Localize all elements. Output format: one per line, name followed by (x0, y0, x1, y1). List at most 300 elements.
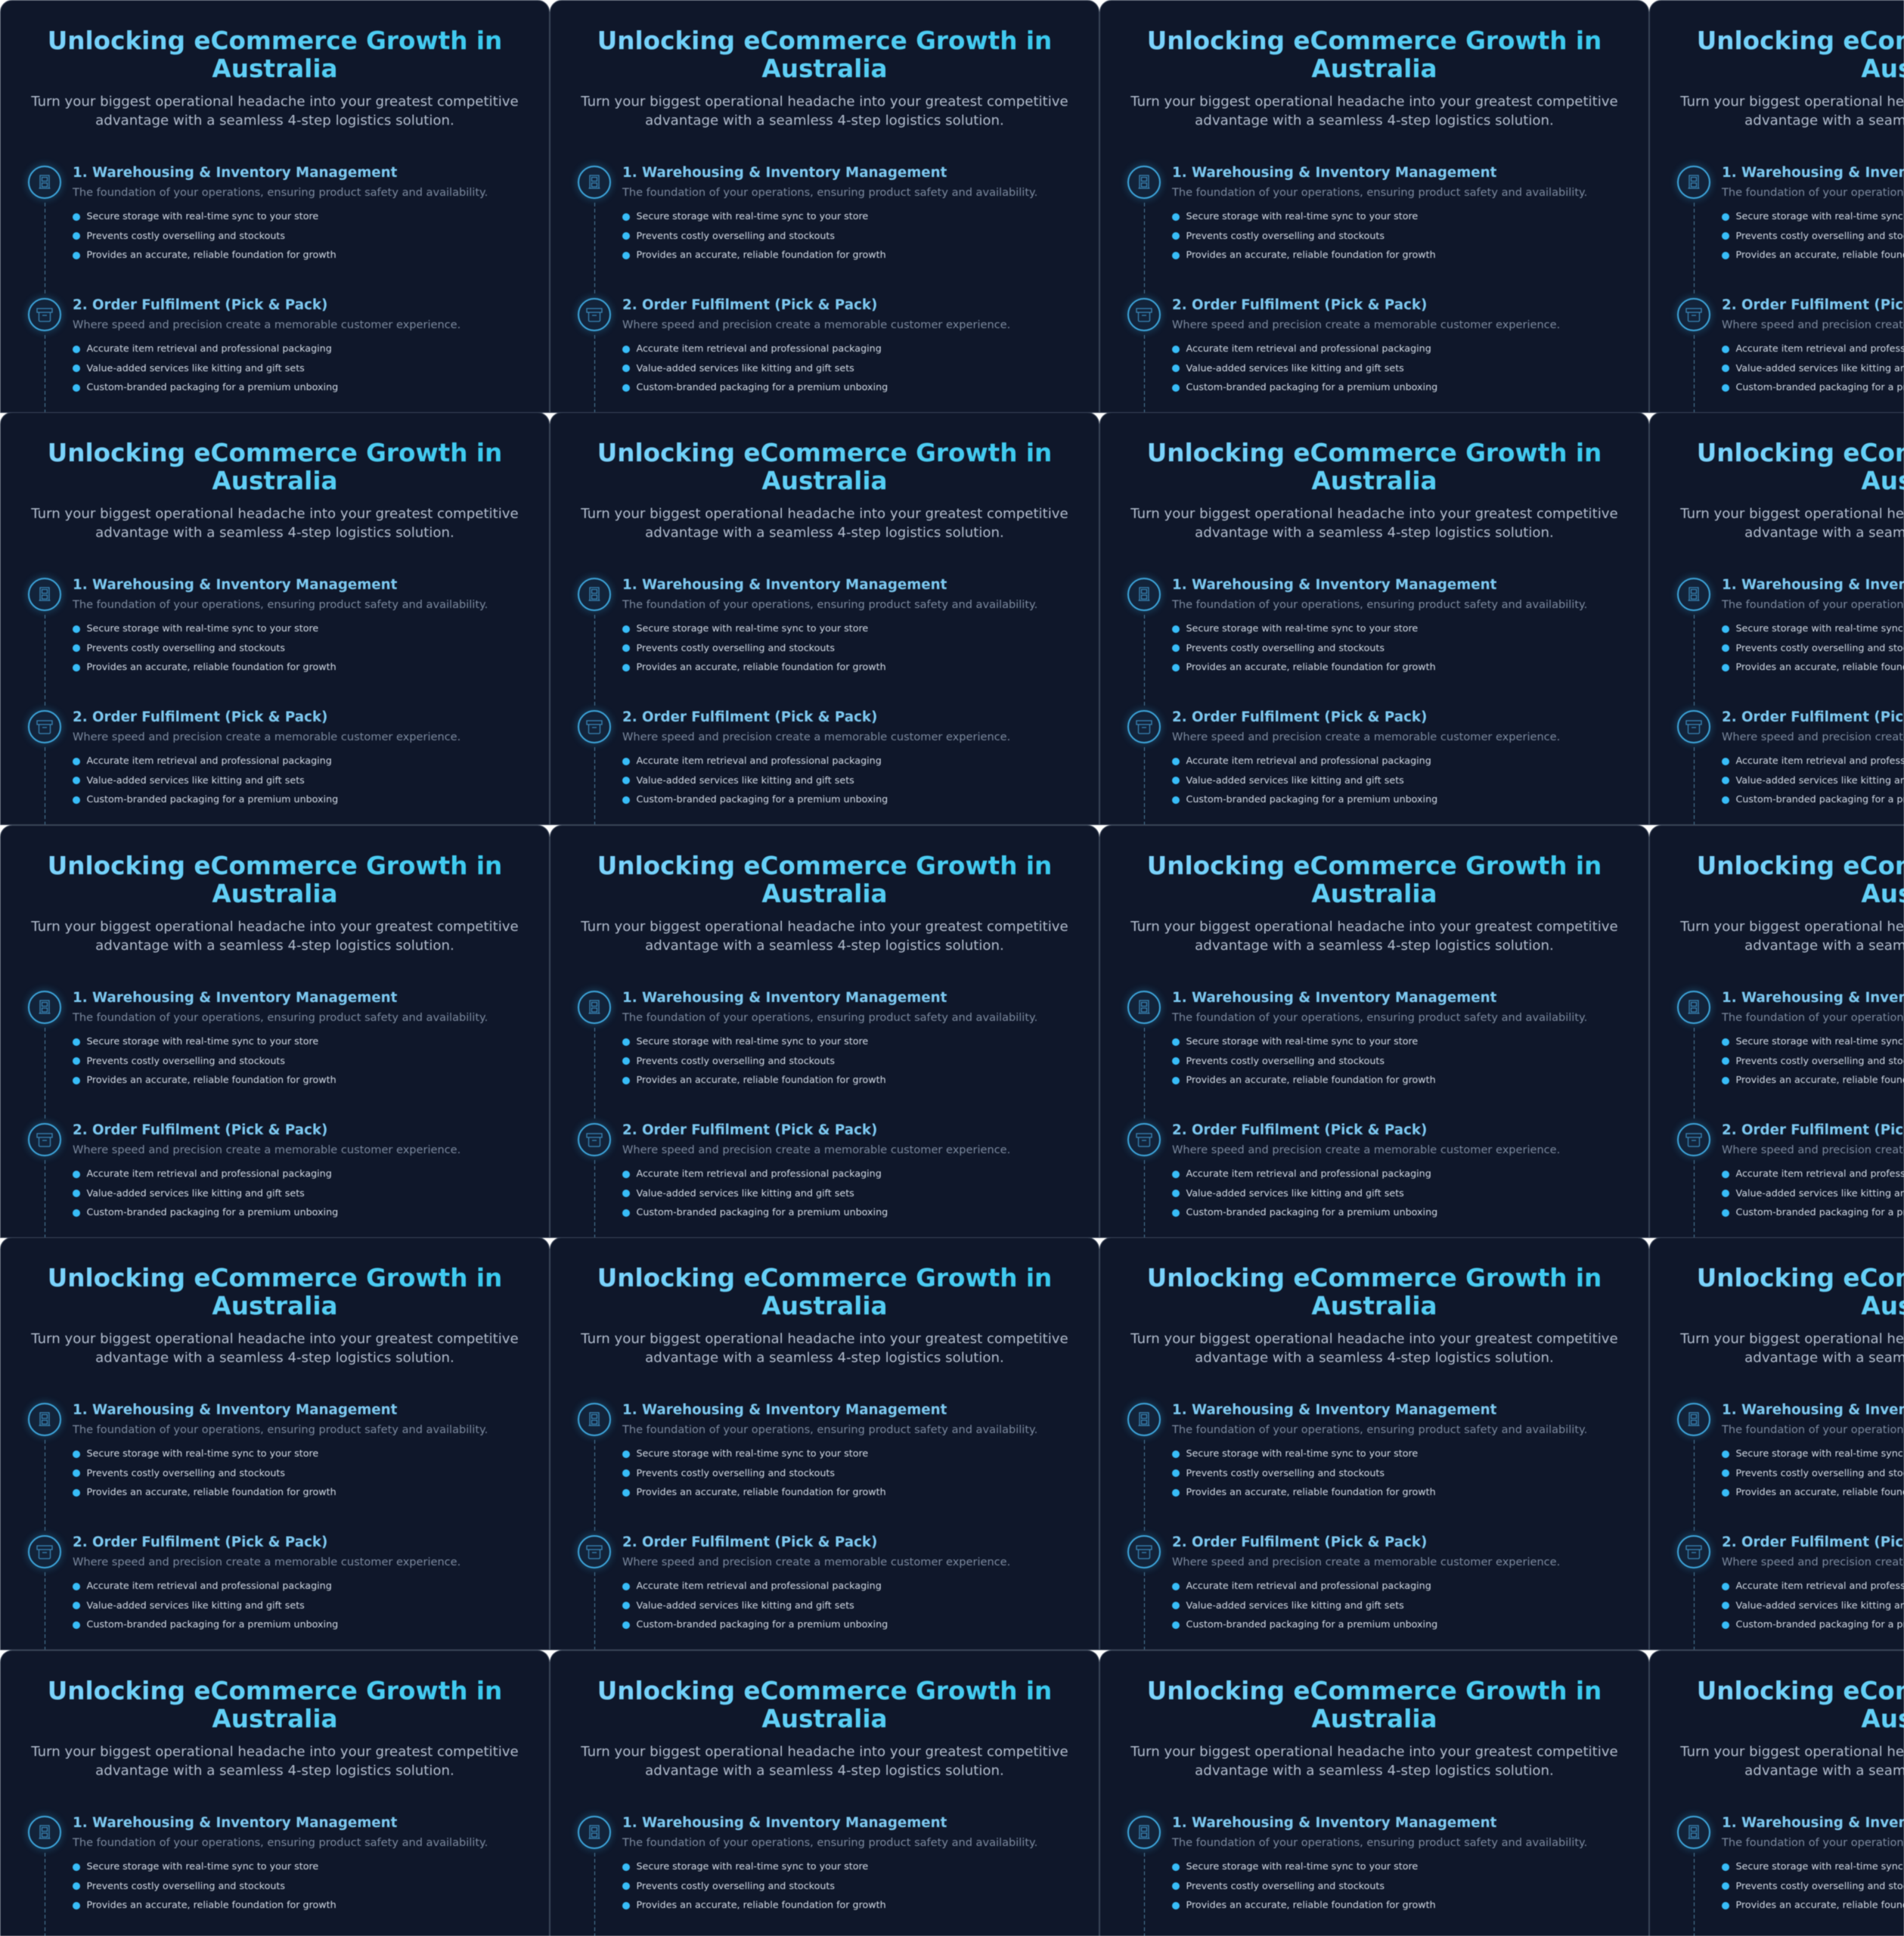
title (550, 439, 1099, 495)
title (550, 852, 1099, 908)
bullets: Custom-branded packaging for a premium unboxing (637, 381, 888, 392)
bullets: Prevents costly overselling and stockouts (86, 230, 285, 241)
bullets: Secure storage with real-time sync to your store (1186, 1035, 1418, 1047)
title: Unlocking eCommerce Growth in (48, 852, 502, 880)
icon: box (28, 1123, 61, 1156)
bullets (73, 1578, 526, 1632)
bullets: Secure storage with real-time sync to your store (637, 1860, 868, 1872)
subtitle (550, 1742, 1099, 1781)
step description: Where speed and precision create a memorable customer experience. (73, 731, 460, 743)
title (1099, 852, 1649, 908)
connector (1694, 335, 1695, 413)
tile r1c1 (0, 0, 550, 413)
subtitle: Turn your biggest operational headache into your greatest competitive (31, 919, 519, 935)
bullets (622, 1446, 1075, 1500)
bullets: Custom-branded packaging for a premium unboxing (637, 1618, 888, 1630)
connector (1694, 1028, 1695, 1121)
connector (594, 747, 595, 825)
step description: The foundation of your operations, ensuring product safety and availability. (622, 1423, 1037, 1436)
title: Australia (1311, 880, 1437, 908)
subtitle: Turn your biggest operational headache into your greatest competitive (31, 1744, 519, 1760)
icon: warehouse (1127, 991, 1161, 1024)
title: Australia (761, 467, 888, 495)
bullets: Accurate item retrieval and professional packaging (1186, 343, 1431, 354)
bullets: Secure storage with real-time sync to your store (637, 1035, 868, 1047)
bullets: Provides an accurate, reliable foundation for growth (1186, 1486, 1436, 1497)
tile r1c4 (1649, 0, 1904, 413)
connector (594, 1853, 595, 1936)
title (0, 852, 550, 908)
bullets: Secure storage with real-time sync to your store (1186, 1447, 1418, 1459)
tile r3c2 (550, 825, 1099, 1238)
title: Australia (212, 1705, 338, 1733)
step heading: 2. Order Fulfilment (Pick & Pack) (622, 1122, 877, 1138)
title: Australia (761, 880, 888, 908)
bullets: Prevents costly overselling and stockouts (86, 642, 285, 653)
title: Australia (761, 1292, 888, 1320)
subtitle: advantage with a seamless 4-step logistics solution. (645, 1350, 1004, 1366)
step 1 (1099, 991, 1649, 1123)
title: Unlocking eCommerce Growth in (48, 439, 502, 467)
bullets: Prevents costly overselling and stockouts (637, 1880, 835, 1891)
icon: box (28, 298, 61, 331)
bullets: Accurate item retrieval and professional packaging (637, 343, 882, 354)
step 2 (550, 1123, 1099, 1238)
bullets: Custom-branded packaging for a premium unboxing (86, 1206, 338, 1218)
title: Unlocking eCommerce Growth in (48, 26, 502, 55)
icon: box (1677, 298, 1710, 331)
step description: Where speed and precision create a memorable customer experience. (1172, 318, 1560, 331)
step heading: 1. Warehousing & Inventory Management (1172, 1402, 1496, 1418)
step description: Where speed and precision create a memorable customer experience. (622, 731, 1010, 743)
step 2 (1124, 293, 1560, 413)
title: Unlocking eCommerce Growth in (48, 1677, 502, 1705)
subtitle: Turn your biggest operational headache into your greatest competitive (31, 1331, 519, 1347)
bullets (622, 1034, 1075, 1087)
bullets (1171, 755, 1437, 805)
icon: box (1677, 1535, 1710, 1568)
icon: box (578, 1123, 611, 1156)
step 1 (24, 573, 488, 706)
step 2 (573, 293, 1010, 413)
bullets (1172, 1578, 1626, 1632)
subtitle: Turn your biggest operational headache into your greatest competitive (31, 506, 519, 522)
bullets: Provides an accurate, reliable foundation for growth (637, 1899, 886, 1910)
icon: warehouse (1127, 166, 1161, 199)
bullets: Provides an accurate, reliable foundation for growth (1186, 1899, 1436, 1910)
tile r4c4 (1649, 1237, 1904, 1650)
bullets: Provides an accurate, reliable foundation for growth (637, 249, 886, 260)
connector (1694, 1572, 1695, 1650)
step heading: 1. Warehousing & Inventory Management (73, 1815, 397, 1831)
bullets: Prevents costly overselling and stockouts (86, 1880, 285, 1891)
title (1649, 27, 1904, 82)
subtitle: Turn your biggest operational headache into your greatest competitive (581, 1744, 1068, 1760)
bullets: Accurate item retrieval and professional packaging (637, 1580, 882, 1591)
connector (1694, 1440, 1695, 1533)
subtitle: Turn your biggest operational headache into your greatest competitive (1130, 94, 1618, 110)
title (1649, 1264, 1904, 1320)
bullets: Provides an accurate, reliable foundation for growth (86, 1074, 336, 1085)
step 1 (1124, 162, 1587, 293)
bullets (73, 1034, 526, 1087)
title: Australia (212, 880, 338, 908)
bullets: Prevents costly overselling and stockouts (1186, 1467, 1385, 1478)
icon: warehouse (1127, 1816, 1161, 1849)
icon: warehouse (1677, 1403, 1710, 1436)
bullets (1171, 622, 1436, 673)
bullets: Value-added services like kitting and gift sets (637, 774, 854, 786)
title: Unlocking eCommerce Growth in (48, 1264, 502, 1292)
bullets: Custom-branded packaging for a premium unboxing (637, 793, 888, 805)
bullets: Provides an accurate, reliable foundation for growth (86, 1486, 336, 1497)
bullets: Provides an accurate, reliable foundation for growth (1186, 1074, 1436, 1085)
icon: warehouse (28, 1816, 61, 1849)
bullets: Accurate item retrieval and professional packaging (86, 755, 332, 766)
tile r5c1 (0, 1650, 550, 1936)
step 1 (550, 1403, 1099, 1535)
subtitle (550, 1329, 1099, 1368)
step description: Where speed and precision create a memorable customer experience. (1172, 1143, 1560, 1156)
bullets: Provides an accurate, reliable foundation for growth (1186, 661, 1436, 672)
step 1 (0, 1403, 550, 1535)
tile r1c2 (550, 0, 1099, 413)
step description: The foundation of your operations, ensuring product safety and availability. (1172, 598, 1587, 611)
bullets (622, 1859, 1075, 1913)
subtitle: advantage with a seamless 4-step logistics solution. (1195, 938, 1554, 954)
subtitle (1099, 1329, 1649, 1368)
bullets: Value-added services like kitting and gift sets (1186, 1187, 1404, 1199)
icon: box (1677, 1123, 1710, 1156)
icon: box (578, 298, 611, 331)
bullets: Value-added services like kitting and gift sets (637, 362, 854, 374)
icon: box (28, 1535, 61, 1568)
title: Unlocking eCommerce Growth in (1147, 1264, 1602, 1292)
subtitle: Turn your biggest operational headache into your greatest competitive (1130, 919, 1618, 935)
step description: The foundation of your operations, ensuring product safety and availability. (1172, 1011, 1587, 1024)
subtitle (1099, 917, 1649, 956)
step 2 (1649, 1535, 1904, 1650)
subtitle: advantage with a seamless 4-step logistics solution. (1195, 1350, 1554, 1366)
step description: Where speed and precision create a memorable customer experience. (73, 1556, 460, 1568)
connector (1694, 1160, 1695, 1238)
connector (1144, 335, 1145, 413)
step description: The foundation of your operations, ensuring product safety and availability. (1172, 1836, 1587, 1849)
step description: The foundation of your operations, ensuring product safety and availability. (73, 186, 488, 199)
bullets: Custom-branded packaging for a premium unboxing (1186, 1618, 1437, 1630)
step heading: 2. Order Fulfilment (Pick & Pack) (1172, 297, 1427, 313)
step description: Where speed and precision create a memorable customer experience. (73, 318, 460, 331)
icon: box (578, 710, 611, 743)
connector (1144, 1440, 1145, 1533)
title: Australia (761, 54, 888, 83)
connector (594, 615, 595, 708)
bullets (622, 1578, 1075, 1632)
step 2 (24, 706, 460, 824)
bullets: Value-added services like kitting and gift sets (637, 1187, 854, 1199)
title (1099, 439, 1649, 495)
step 1 (1099, 1403, 1649, 1535)
title (550, 1677, 1099, 1733)
step heading: 1. Warehousing & Inventory Management (1172, 990, 1496, 1006)
step heading: 1. Warehousing & Inventory Management (73, 1402, 397, 1418)
bullets: Secure storage with real-time sync to your store (1186, 210, 1418, 222)
icon: box (28, 710, 61, 743)
step description: The foundation of your operations, ensuring product safety and availability. (622, 1011, 1037, 1024)
icon: box (578, 1535, 611, 1568)
title: Australia (1311, 1705, 1437, 1733)
step 2 (1099, 1535, 1649, 1650)
tile r3c1 (0, 825, 550, 1238)
bullets: Provides an accurate, reliable foundation for growth (637, 661, 886, 672)
bullets (1721, 755, 1904, 805)
bullets (72, 755, 338, 805)
bullets: Prevents costly overselling and stockouts (86, 1467, 285, 1478)
subtitle (581, 94, 1068, 129)
bullets (622, 1166, 1075, 1220)
step 2 (1673, 293, 1904, 413)
title: Australia (1311, 1292, 1437, 1320)
bullets: Secure storage with real-time sync to your store (86, 210, 318, 222)
bullets: Custom-branded packaging for a premium unboxing (1186, 381, 1437, 392)
subtitle: Turn your biggest operational headache into your greatest competitive (581, 1331, 1068, 1347)
connector (1694, 1853, 1695, 1936)
bullets (1721, 1034, 1904, 1087)
bullets: Prevents costly overselling and stockouts (637, 1467, 835, 1478)
title: Unlocking eCommerce Growth in (1147, 852, 1602, 880)
connector (1144, 1572, 1145, 1650)
title: Unlocking eCommerce Growth in (1147, 439, 1602, 467)
bullets (1721, 1578, 1904, 1632)
step 1 (0, 991, 550, 1123)
step heading: 2. Order Fulfilment (Pick & Pack) (622, 297, 877, 313)
bullets (1172, 1859, 1626, 1913)
step description: Where speed and precision create a memorable customer experience. (622, 318, 1010, 331)
bullets: Prevents costly overselling and stockouts (1186, 230, 1385, 241)
step description: Where speed and precision create a memorable customer experience. (1172, 731, 1560, 743)
bullets: Accurate item retrieval and professional packaging (637, 755, 882, 766)
step 2 (1124, 706, 1560, 824)
subtitle (30, 506, 519, 541)
title: Unlocking eCommerce Growth in (597, 26, 1052, 55)
tile r4c1 (0, 1237, 550, 1650)
bullets: Value-added services like kitting and gift sets (86, 1187, 305, 1199)
subtitle (581, 506, 1068, 541)
subtitle: advantage with a seamless 4-step logistics solution. (1195, 1763, 1554, 1779)
tile r2c3 (1099, 412, 1649, 825)
tile r4c3 (1099, 1237, 1649, 1650)
step description: Where speed and precision create a memorable customer experience. (1172, 1556, 1560, 1568)
subtitle (1649, 1742, 1904, 1781)
step 1 (573, 162, 1037, 293)
step 2 (24, 293, 460, 413)
step heading: 2. Order Fulfilment (Pick & Pack) (1172, 1534, 1427, 1550)
step heading: 1. Warehousing & Inventory Management (1172, 165, 1496, 181)
bullets: Prevents costly overselling and stockouts (1186, 642, 1385, 653)
step 1 (550, 991, 1099, 1123)
bullets (1721, 210, 1904, 260)
bullets: Prevents costly overselling and stockouts (1186, 1055, 1385, 1066)
icon: box (1127, 1535, 1161, 1568)
icon: box (1127, 1123, 1161, 1156)
bullets: Value-added services like kitting and gift sets (86, 362, 305, 374)
bullets (1721, 343, 1904, 393)
connector (1694, 203, 1695, 296)
step 1 (1649, 1816, 1904, 1936)
tile r2c1 (0, 412, 550, 825)
bullets: Custom-branded packaging for a premium unboxing (86, 381, 338, 392)
step description: The foundation of your operations, ensuring product safety and availability. (622, 598, 1037, 611)
bullets: Secure storage with real-time sync to your store (637, 210, 868, 222)
icon: warehouse (578, 1403, 611, 1436)
connector (1144, 1853, 1145, 1936)
subtitle (30, 94, 519, 129)
step heading: 2. Order Fulfilment (Pick & Pack) (622, 709, 877, 725)
bullets: Secure storage with real-time sync to your store (1186, 622, 1418, 634)
step description: The foundation of your operations, ensuring product safety and availability. (73, 1011, 488, 1024)
subtitle: advantage with a seamless 4-step logistics solution. (95, 1763, 454, 1779)
bullets: Secure storage with real-time sync to your store (86, 1447, 318, 1459)
connector (1144, 615, 1145, 708)
icon: warehouse (1677, 578, 1710, 611)
title (1099, 1264, 1649, 1320)
title (0, 439, 550, 495)
bullets: Value-added services like kitting and gift sets (86, 774, 305, 786)
subtitle: Turn your biggest operational headache into your greatest competitive (1130, 1744, 1618, 1760)
bullets: Value-added services like kitting and gift sets (1186, 362, 1404, 374)
step description: The foundation of your operations, ensuring product safety and availability. (622, 186, 1037, 199)
bullets (622, 622, 886, 673)
icon: warehouse (28, 1403, 61, 1436)
step description: The foundation of your operations, ensuring product safety and availability. (73, 1836, 488, 1849)
title (550, 27, 1099, 82)
title: Australia (1311, 467, 1437, 495)
step 1 (1649, 1403, 1904, 1535)
tile r3c3 (1099, 825, 1649, 1238)
bullets: Custom-branded packaging for a premium unboxing (86, 1618, 338, 1630)
connector (1144, 203, 1145, 296)
subtitle: Turn your biggest operational headache into your greatest competitive (581, 919, 1068, 935)
subtitle (1130, 94, 1618, 129)
title: Unlocking eCommerce Growth in (597, 439, 1052, 467)
step description: The foundation of your operations, ensuring product safety and availability. (1172, 1423, 1587, 1436)
tile r1c3 (1099, 0, 1649, 413)
tile r4c2 (550, 1237, 1099, 1650)
step heading: 2. Order Fulfilment (Pick & Pack) (73, 709, 327, 725)
step 1 (1673, 573, 1904, 706)
bullets: Custom-branded packaging for a premium unboxing (86, 793, 338, 805)
title (550, 1264, 1099, 1320)
subtitle: advantage with a seamless 4-step logistics solution. (95, 1350, 454, 1366)
bullets: Prevents costly overselling and stockouts (86, 1055, 285, 1066)
step description: The foundation of your operations, ensuring product safety and availability. (1172, 186, 1587, 199)
subtitle (1680, 94, 1904, 129)
step 2 (1673, 706, 1904, 824)
bullets: Secure storage with real-time sync to your store (637, 622, 868, 634)
bullets (73, 1166, 526, 1220)
bullets: Prevents costly overselling and stockouts (637, 1055, 835, 1066)
step heading: 1. Warehousing & Inventory Management (73, 165, 397, 181)
bullets (1721, 1859, 1904, 1913)
subtitle (1099, 1742, 1649, 1781)
icon: warehouse (578, 991, 611, 1024)
bullets: Prevents costly overselling and stockouts (637, 230, 835, 241)
step 2 (0, 1535, 550, 1650)
step description: Where speed and precision create a memorable customer experience. (622, 1556, 1010, 1568)
subtitle: Turn your biggest operational headache into your greatest competitive (1130, 506, 1618, 522)
bullets: Value-added services like kitting and gift sets (1186, 1599, 1404, 1611)
connector (1144, 1028, 1145, 1121)
icon: warehouse (1677, 166, 1710, 199)
bullets: Accurate item retrieval and professional packaging (1186, 1580, 1431, 1591)
step heading: 1. Warehousing & Inventory Management (1172, 1815, 1496, 1831)
bullets (622, 210, 886, 260)
step heading: 1. Warehousing & Inventory Management (622, 165, 947, 181)
icon: box (1677, 710, 1710, 743)
icon: warehouse (1127, 578, 1161, 611)
step heading: 1. Warehousing & Inventory Management (1172, 577, 1496, 593)
subtitle: Turn your biggest operational headache into your greatest competitive (581, 94, 1068, 110)
step heading: 2. Order Fulfilment (Pick & Pack) (1172, 709, 1427, 725)
connector (594, 1028, 595, 1121)
step heading: 2. Order Fulfilment (Pick & Pack) (73, 1534, 327, 1550)
subtitle (1649, 1329, 1904, 1368)
bullets (72, 210, 336, 260)
bullets: Prevents costly overselling and stockouts (637, 642, 835, 653)
tile r5c4 (1649, 1650, 1904, 1936)
connector (594, 203, 595, 296)
title (1649, 1677, 1904, 1733)
icon: warehouse (1677, 991, 1710, 1024)
subtitle: advantage with a seamless 4-step logistics solution. (95, 525, 454, 541)
bullets: Custom-branded packaging for a premium unboxing (1186, 1206, 1437, 1218)
tile r3c4 (1649, 825, 1904, 1238)
subtitle: Turn your biggest operational headache into your greatest competitive (581, 506, 1068, 522)
connector (594, 1440, 595, 1533)
subtitle: Turn your biggest operational headache into your greatest competitive (31, 94, 519, 110)
step heading: 1. Warehousing & Inventory Management (73, 577, 397, 593)
title: Unlocking eCommerce Growth in (597, 1677, 1052, 1705)
title: Unlocking eCommerce Growth in (1147, 26, 1602, 55)
subtitle: Turn your biggest operational headache into your greatest competitive (1130, 1331, 1618, 1347)
step heading: 1. Warehousing & Inventory Management (622, 577, 947, 593)
title (0, 27, 550, 82)
step 2 (0, 1123, 550, 1238)
icon: warehouse (1677, 1816, 1710, 1849)
title: Australia (761, 1705, 888, 1733)
bullets: Value-added services like kitting and gift sets (86, 1599, 305, 1611)
title (1649, 852, 1904, 908)
bullets (1171, 210, 1436, 260)
bullets: Provides an accurate, reliable foundation for growth (1186, 249, 1436, 260)
subtitle: advantage with a seamless 4-step logistics solution. (95, 113, 454, 129)
step 1 (24, 162, 488, 293)
title: Australia (1311, 54, 1437, 83)
title: Australia (212, 54, 338, 83)
bullets (73, 1446, 526, 1500)
connector (1144, 1160, 1145, 1238)
bullets: Accurate item retrieval and professional packaging (86, 1580, 332, 1591)
bullets: Value-added services like kitting and gift sets (1186, 774, 1404, 786)
step heading: 1. Warehousing & Inventory Management (622, 1815, 947, 1831)
bullets (622, 755, 888, 805)
title: Unlocking eCommerce Growth in (1147, 1677, 1602, 1705)
step 1 (573, 573, 1037, 706)
connector (1694, 615, 1695, 708)
icon: warehouse (28, 991, 61, 1024)
subtitle: advantage with a seamless 4-step logistics solution. (1195, 113, 1554, 129)
bullets: Secure storage with real-time sync to your store (86, 622, 318, 634)
